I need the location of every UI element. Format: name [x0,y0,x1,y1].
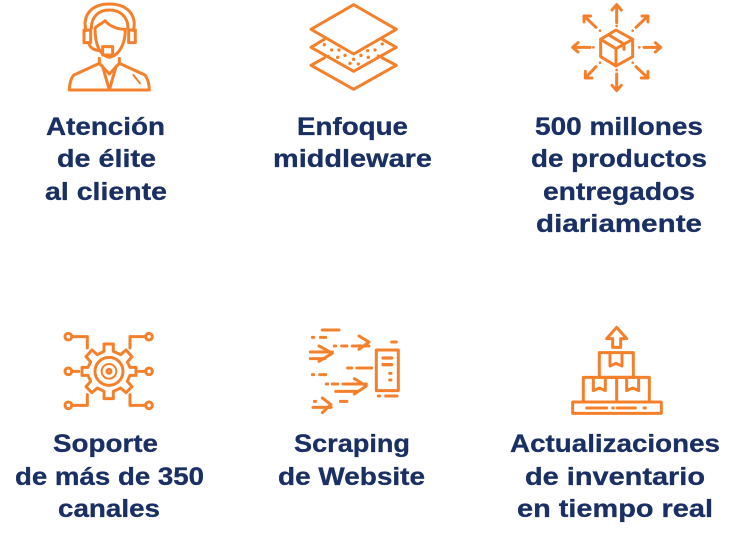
label: Soporte de más de 350 canales: Soporte [53,430,158,458]
label: Enfoque middleware [273,113,432,173]
label: Actualizaciones de inventario en tiempo real: Actualizaciones [510,430,720,458]
label: Atención de élite al cliente: de élite [57,145,156,173]
label: Enfoque middleware: Enfoque [297,113,408,141]
label: 500 millones de productos entregados diariamente [531,113,707,238]
label: 500 millones de productos entregados diariamente: 500 millones [535,113,703,141]
icon: support agent with headset [69,4,149,90]
label: Scraping de Website: de Website [278,463,425,491]
label: Atención de élite al cliente: al cliente [45,178,167,206]
label: Soporte de más de 350 canales: de más de 350 [15,463,204,491]
icon: gear with circuit nodes [65,333,152,409]
label: 500 millones de productos entregados diariamente: entregados [543,178,695,206]
label: Soporte de más de 350 canales [15,430,204,523]
label: Atención de élite al cliente: Atención [46,113,165,141]
icon: website scraping arrows [310,330,398,413]
label: Atención de élite al cliente [45,113,167,206]
label: 500 millones de productos entregados diariamente: diariamente [536,210,702,238]
label: 500 millones de productos entregados diariamente: de productos [531,145,707,173]
label: Scraping de Website: Scraping [294,430,410,458]
label: Actualizaciones de inventario en tiempo real [510,430,720,523]
label: Enfoque middleware: middleware [273,145,432,173]
icon: stacked boxes on pallet with up arrow [573,327,661,413]
label: Scraping de Website [278,430,425,491]
label: Soporte de más de 350 canales: canales [58,495,160,523]
icon: stacked layers [311,5,396,89]
label: Actualizaciones de inventario en tiempo real: en tiempo real [517,495,713,523]
icon: box with outward arrows [573,5,661,91]
label: Actualizaciones de inventario en tiempo real: de inventario [525,463,705,491]
